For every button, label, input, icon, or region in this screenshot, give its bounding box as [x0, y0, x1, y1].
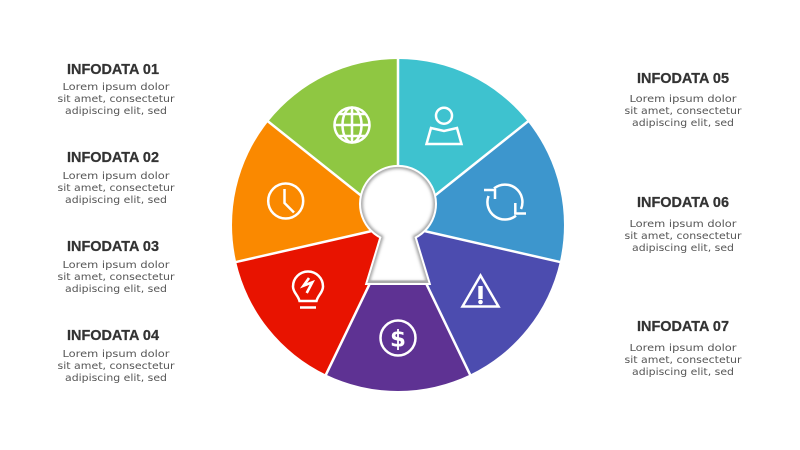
icon: dollar coin: $ — [390, 326, 406, 352]
text block: infodata 01: INFODATA 01 — [67, 62, 159, 78]
text block: infodata 01: adipiscing elit, sed — [65, 106, 167, 117]
text block: infodata 02: Lorem ipsum dolor — [62, 171, 171, 182]
segment: orange — [232, 122, 398, 262]
text block: infodata 07 — [624, 319, 742, 378]
text block: infodata 04 — [58, 328, 175, 384]
text block: infodata 06: Lorem ipsum dolor — [630, 219, 738, 230]
text block: infodata 07: sit amet, consectetur — [624, 355, 742, 366]
icon: globe — [334, 108, 370, 142]
segment: teal — [398, 59, 528, 225]
icon: person on map — [426, 108, 462, 144]
text block: infodata 06: adipiscing elit, sed — [632, 243, 734, 254]
text block: infodata 02: INFODATA 02 — [67, 150, 159, 166]
segment: green — [268, 59, 398, 225]
segment: purple — [326, 225, 470, 391]
text block: infodata 03: INFODATA 03 — [67, 239, 159, 255]
text block: infodata 03: adipiscing elit, sed — [65, 284, 167, 295]
text block: infodata 02: sit amet, consectetur — [58, 183, 175, 194]
segment: indigo — [398, 225, 560, 375]
text block: infodata 01: Lorem ipsum dolor — [62, 82, 171, 93]
keyhole wheel — [232, 58, 564, 391]
text block: infodata 06 — [624, 195, 742, 254]
text block: infodata 01 — [58, 62, 175, 117]
text block: infodata 02: adipiscing elit, sed — [65, 195, 167, 206]
text block: infodata 07: Lorem ipsum dolor — [630, 343, 738, 354]
text block: infodata 05: sit amet, consectetur — [624, 106, 742, 117]
icon: light bulb — [293, 272, 323, 308]
segment: red — [236, 225, 398, 375]
text block: infodata 04: Lorem ipsum dolor — [62, 349, 171, 360]
text block: infodata 02 — [58, 150, 175, 206]
text block: infodata 01: sit amet, consectetur — [58, 94, 175, 105]
text block: infodata 05: adipiscing elit, sed — [632, 118, 734, 129]
text block: infodata 04: adipiscing elit, sed — [65, 373, 167, 384]
text block: infodata 05: Lorem ipsum dolor — [630, 94, 738, 105]
segment: blue — [398, 122, 564, 262]
text block: infodata 05 — [624, 71, 742, 129]
text block: infodata 04: INFODATA 04 — [67, 328, 159, 344]
text block: infodata 03 — [58, 239, 175, 295]
text block: infodata 06: sit amet, consectetur — [624, 231, 742, 242]
icon: refresh arrows — [484, 185, 526, 220]
icon: clock — [268, 184, 303, 218]
keyhole cut-out — [361, 167, 435, 284]
text block: infodata 03: sit amet, consectetur — [58, 272, 175, 283]
icon: warning triangle — [462, 276, 498, 306]
icon: dollar coin — [380, 320, 416, 356]
text block: infodata 07: INFODATA 07 — [637, 319, 729, 335]
text block: infodata 05: INFODATA 05 — [637, 71, 729, 87]
text block: infodata 04: sit amet, consectetur — [58, 361, 175, 372]
text block: infodata 07: adipiscing elit, sed — [632, 367, 734, 378]
text block: infodata 06: INFODATA 06 — [637, 195, 729, 211]
text block: infodata 03: Lorem ipsum dolor — [62, 260, 171, 271]
